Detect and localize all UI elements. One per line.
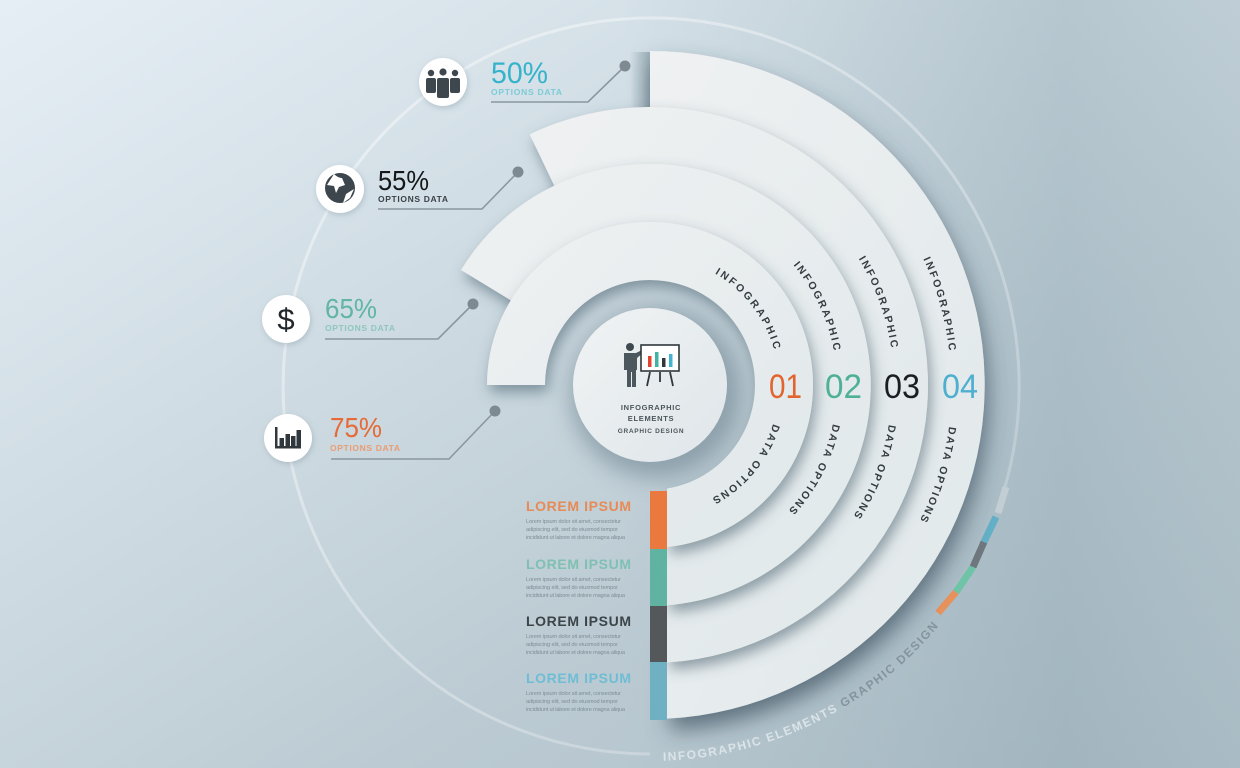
stat 75%: 75%	[330, 412, 382, 443]
stat 55%	[316, 165, 524, 213]
ring numbers: 04	[942, 368, 978, 406]
stat 50%: OPTIONS DATA	[491, 87, 562, 97]
large outer ring outline	[283, 18, 1019, 754]
ring 2	[460, 161, 884, 621]
lorem block teal: Lorem ipsum dolor sit amet, consectetur	[526, 577, 621, 583]
icon: bar chart	[264, 414, 312, 462]
icon: globe	[316, 165, 364, 213]
ring text: data options: DATA OPTIONS	[790, 424, 840, 514]
lorem block orange: adipiscing elit, sed do eiusmod tempor	[526, 527, 618, 533]
colour tabs	[650, 491, 667, 720]
lorem block teal: adipiscing elit, sed do eiusmod tempor	[526, 585, 618, 591]
center disc cast shadow	[570, 306, 742, 478]
stat 50%: 50%	[491, 57, 548, 90]
stat 65%: OPTIONS DATA	[325, 323, 395, 333]
icon: dollar: $	[277, 302, 295, 337]
lorem block blue: LOREM IPSUM	[526, 670, 631, 686]
lorem block blue: Lorem ipsum dolor sit amet, consectetur	[526, 691, 621, 697]
label: ring 4 infographic: INFOGRAPHIC	[924, 256, 956, 350]
ring 3	[528, 104, 941, 678]
ring numbers: 02	[825, 368, 862, 406]
label: ring 2 infographic: INFOGRAPHIC	[794, 261, 840, 350]
disc caption	[618, 403, 684, 435]
lorem block orange: LOREM IPSUM	[526, 498, 631, 514]
outer ring colour segments	[938, 487, 1006, 613]
disc caption: ELEMENTS	[628, 414, 674, 423]
lorem block blue: incididunt ut labore et dolore magna aliqua	[526, 707, 626, 713]
ring text: data options: DATA OPTIONS	[713, 424, 780, 504]
disc caption: INFOGRAPHIC	[621, 403, 681, 412]
icon: presenter with chart board	[624, 343, 679, 387]
lorem block teal	[526, 556, 631, 599]
curved caption: infographic elements graphic design: INFOGRAPHIC ELEMENTS GRAPHIC DESIGN	[664, 622, 938, 761]
label: ring 3 infographic: INFOGRAPHIC	[859, 256, 898, 348]
lorem block dark: LOREM IPSUM	[526, 613, 631, 629]
lorem block blue: adipiscing elit, sed do eiusmod tempor	[526, 699, 618, 705]
lorem block dark: Lorem ipsum dolor sit amet, consectetur	[526, 634, 621, 640]
stat 55%: OPTIONS DATA	[378, 194, 448, 204]
icon: dollar	[262, 295, 310, 343]
lorem block blue	[526, 670, 631, 713]
lorem block teal: LOREM IPSUM	[526, 556, 631, 572]
ring text: data options	[713, 424, 956, 522]
center disc	[573, 308, 727, 462]
disc caption: GRAPHIC DESIGN	[618, 428, 684, 435]
lorem block dark	[526, 613, 631, 656]
stat 65%: 65%	[325, 293, 377, 324]
stat 50%	[419, 57, 630, 106]
icon: people	[419, 58, 467, 106]
ring 4 shaded cut edge	[630, 52, 650, 108]
ring numbers: 01	[769, 368, 802, 406]
ring text: data options: DATA OPTIONS	[854, 425, 896, 518]
lorem block teal: incididunt ut labore et dolore magna aliqua	[526, 593, 626, 599]
ring numbers	[769, 368, 978, 406]
stat 75%	[264, 406, 500, 462]
stat 65%	[262, 293, 478, 343]
lorem block orange: Lorem ipsum dolor sit amet, consectetur	[526, 519, 621, 525]
lorem block orange	[526, 498, 631, 541]
ring numbers: 03	[884, 368, 920, 406]
stat 55%: 55%	[378, 165, 429, 196]
label: ring 1 infographic: INFOGRAPHIC	[716, 268, 780, 349]
ring 4	[638, 48, 1002, 744]
ring 1	[483, 219, 826, 562]
lorem block orange: incididunt ut labore et dolore magna aliqua	[526, 535, 626, 541]
lorem block dark: incididunt ut labore et dolore magna aliqua	[526, 650, 626, 656]
ring text: data options: DATA OPTIONS	[921, 427, 956, 522]
lorem block dark: adipiscing elit, sed do eiusmod tempor	[526, 642, 618, 648]
stat 75%: OPTIONS DATA	[330, 443, 400, 453]
